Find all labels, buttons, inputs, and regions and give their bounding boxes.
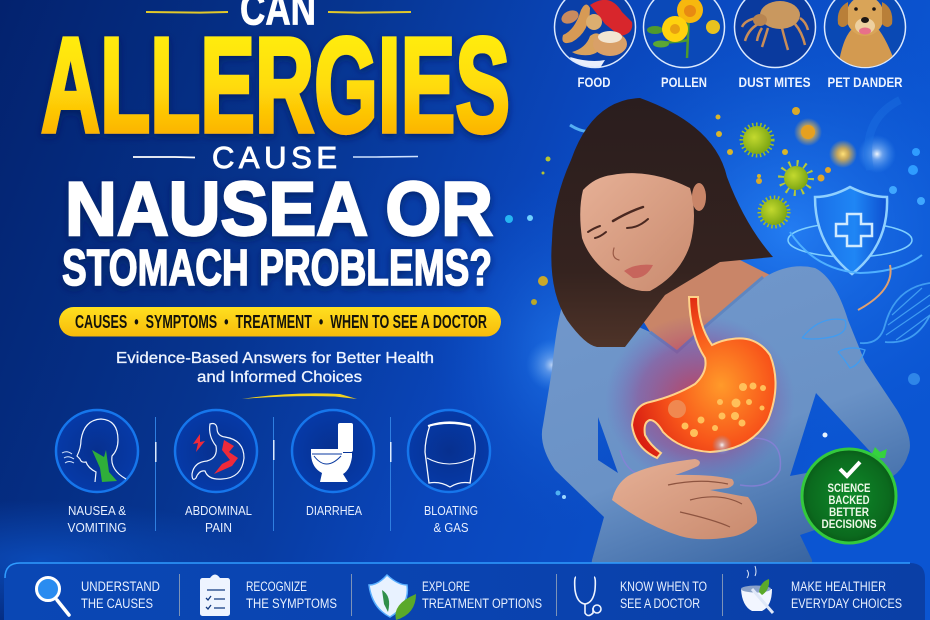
bar labels: THE SYMPTOMS bbox=[246, 596, 337, 611]
bar labels: SEE A DOCTOR bbox=[620, 596, 700, 611]
symptom labels: ABDOMINAL bbox=[185, 504, 252, 518]
badge: science backed: DECISIONS bbox=[822, 517, 876, 531]
symptom labels: BLOATING bbox=[424, 504, 478, 518]
bottom bar bbox=[4, 563, 925, 620]
symptom icons row bbox=[56, 410, 490, 535]
icon: clipboard bbox=[200, 574, 230, 616]
icon: leaf shield bbox=[369, 575, 416, 620]
neck and chest bbox=[630, 250, 770, 352]
title: nausea or: NAUSEA OR bbox=[65, 167, 493, 252]
symptom labels: & GAS bbox=[434, 521, 468, 535]
title block bbox=[41, 0, 510, 296]
topic pill bbox=[59, 307, 501, 336]
bar labels: EVERYDAY CHOICES bbox=[791, 596, 902, 611]
allergen labels: FOOD bbox=[578, 74, 610, 90]
allergen labels: DUST MITES bbox=[738, 74, 810, 90]
badge: science backed: BETTER bbox=[829, 505, 869, 519]
face bbox=[580, 173, 694, 291]
allergen circles bbox=[554, 0, 906, 90]
bar labels: RECOGNIZE bbox=[246, 579, 307, 594]
bar labels: MAKE HEALTHIER bbox=[791, 579, 886, 594]
icon: magnifier bbox=[36, 578, 69, 615]
icon: bloating bbox=[408, 410, 490, 492]
bar labels: EXPLORE bbox=[422, 579, 470, 594]
symptom labels: VOMITING bbox=[68, 521, 126, 535]
allergen labels: POLLEN bbox=[661, 74, 707, 90]
bar labels bbox=[81, 579, 902, 611]
allergen labels: PET DANDER bbox=[828, 74, 902, 90]
stomach glow bbox=[605, 315, 795, 485]
title: allergies: ALLERGIES bbox=[41, 10, 510, 160]
protective shield bbox=[788, 187, 922, 310]
face features bbox=[588, 207, 653, 278]
icon: stethoscope bbox=[575, 577, 601, 616]
symptom labels: DIARRHEA bbox=[306, 504, 363, 518]
allergen: dust mite bbox=[734, 0, 816, 68]
glow streaks bbox=[526, 100, 920, 499]
symptom labels: PAIN bbox=[205, 521, 232, 535]
topic pill: CAUSES • SYMPTOMS • TREATMENT • WHEN TO SEE A DOCTOR bbox=[75, 311, 487, 332]
intestine outline bbox=[620, 438, 780, 486]
title: stomach problems: STOMACH PROBLEMS? bbox=[62, 239, 492, 296]
icon: healthy bowl bbox=[741, 566, 773, 613]
allergen: food bbox=[554, 0, 636, 68]
hair bbox=[551, 98, 773, 347]
shirt neckline bbox=[650, 277, 763, 352]
bar labels: THE CAUSES bbox=[81, 596, 153, 611]
sleeve dna pattern bbox=[802, 319, 865, 368]
icon: abdominal pain bbox=[175, 410, 257, 492]
icon: toilet bbox=[292, 410, 374, 492]
badge: science backed bbox=[802, 447, 896, 543]
bar dividers bbox=[179, 574, 723, 616]
symptom labels: NAUSEA & bbox=[68, 504, 127, 518]
allergen particles bbox=[505, 100, 930, 499]
symptom labels bbox=[68, 504, 478, 535]
bar labels: TREATMENT OPTIONS bbox=[422, 596, 542, 611]
virus particles bbox=[505, 107, 925, 305]
woman illustration bbox=[542, 98, 910, 620]
shirt bbox=[542, 266, 910, 620]
hands bbox=[612, 459, 757, 539]
badge: science backed: SCIENCE bbox=[828, 481, 870, 495]
allergen: pollen bbox=[644, 0, 724, 68]
divider lines bbox=[155, 417, 392, 531]
icon: nausea bbox=[56, 410, 138, 492]
subtitle bbox=[116, 350, 434, 399]
bar labels: KNOW WHEN TO bbox=[620, 579, 707, 594]
bar labels: UNDERSTAND bbox=[81, 579, 160, 594]
stomach bbox=[632, 297, 776, 458]
allergen: pet dander bbox=[824, 0, 906, 68]
allergen labels bbox=[578, 74, 902, 90]
badge: science backed: BACKED bbox=[828, 493, 870, 507]
subtitle: Evidence-Based Answers for Better Health bbox=[116, 350, 434, 367]
subtitle: and Informed Choices bbox=[197, 369, 362, 386]
title: cause: CAUSE bbox=[212, 140, 337, 175]
dna strands bbox=[860, 283, 930, 343]
ear bbox=[692, 183, 706, 211]
